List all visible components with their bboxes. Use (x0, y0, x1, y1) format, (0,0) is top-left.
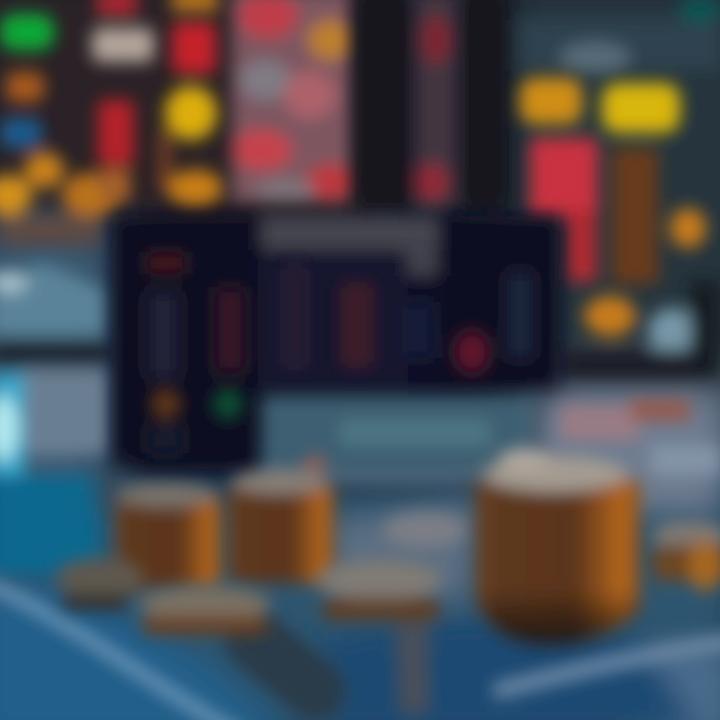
table surface (0, 400, 720, 720)
table edge highlights (0, 585, 720, 720)
icon: flat coins centre (318, 512, 467, 620)
icon: flat coins left (56, 558, 271, 634)
panel: red and white column (92, 0, 154, 200)
panel: monitor (112, 216, 560, 486)
icon: coin stack left (116, 483, 222, 588)
icon: pink desk glow (560, 400, 720, 475)
panel: centre red strip (355, 0, 720, 210)
panel: left indicator lights (0, 14, 118, 245)
icon: coins right edge (652, 520, 720, 591)
panel: red yellow column (160, 0, 223, 206)
icon: coin stack middle (228, 456, 334, 583)
monitor chart bars (145, 252, 533, 453)
monitor screen (112, 216, 560, 471)
icon: large coin stack (476, 449, 640, 645)
panel: pink grey board (232, 0, 354, 202)
panel: right price bars (520, 78, 720, 380)
monitor keyboard (262, 396, 537, 486)
panel: left wall and glow (0, 262, 110, 575)
